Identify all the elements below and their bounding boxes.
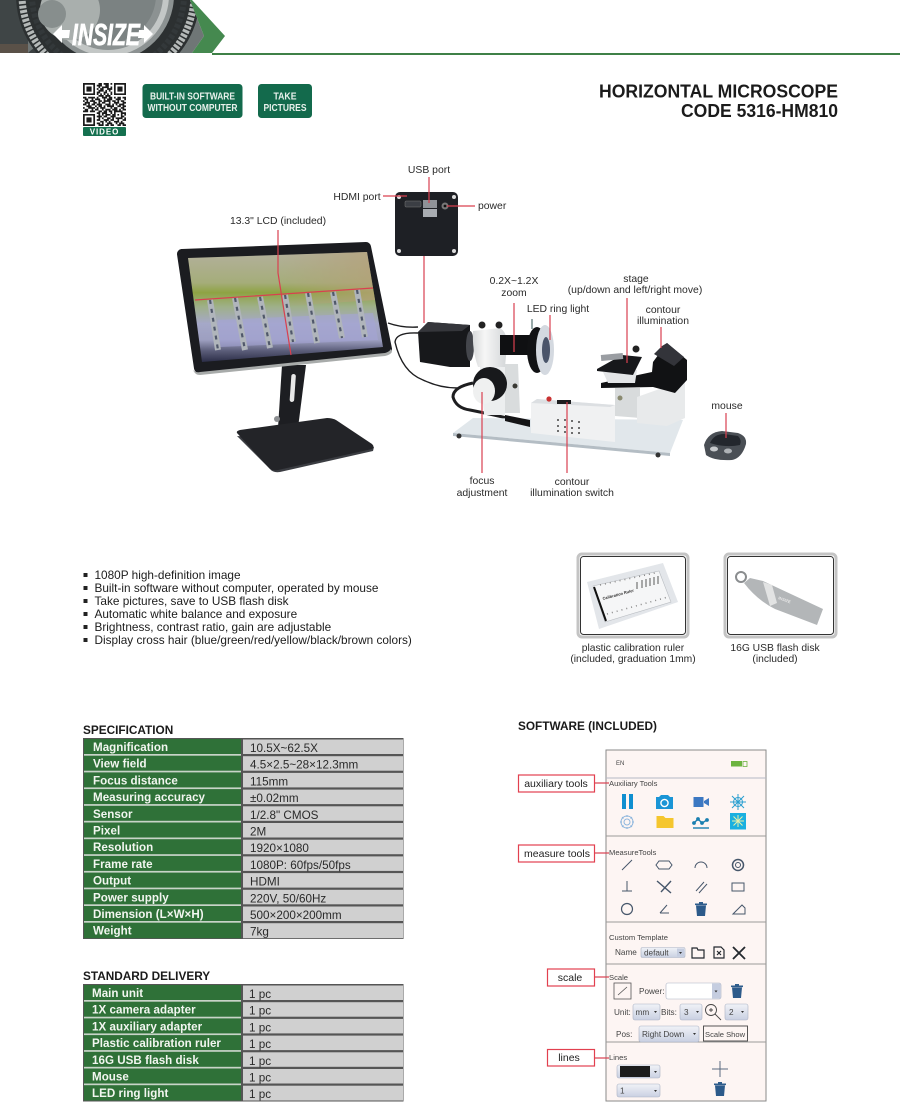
row: 1X camera adapter: 1 pc <box>249 1005 271 1018</box>
badge: built-in software: WITHOUT COMPUTER <box>148 102 238 114</box>
icon: chart <box>693 818 709 828</box>
feature list: Take pictures, save to USB flash disk <box>94 594 289 608</box>
row: power supply: 220V, 50/60Hz <box>250 892 326 905</box>
icon: brightness <box>730 794 746 810</box>
label: HDMI port: HDMI port <box>333 192 381 203</box>
row: 1X camera adapter <box>84 1002 403 1018</box>
icons: measure row 1 <box>622 860 744 870</box>
stage plate <box>603 370 637 383</box>
focus column <box>473 328 507 367</box>
label: contour illumination <box>637 305 689 348</box>
caption <box>570 643 696 665</box>
label: zoom: 0.2X~1.2X <box>490 276 538 287</box>
QR code with video tag <box>83 83 126 137</box>
row: output: HDMI <box>250 876 280 889</box>
table: specification <box>83 738 404 939</box>
row: 1X camera adapter: 1X camera adapter <box>92 1004 196 1017</box>
title <box>599 82 838 121</box>
lines section: Lines <box>609 1053 627 1062</box>
electrical box <box>531 399 615 442</box>
row: mouse: Mouse <box>92 1070 129 1084</box>
QR code with video tag: VIDEO <box>90 128 119 137</box>
label: USB port: USB port <box>408 165 450 176</box>
row: magnification: Magnification <box>93 741 168 754</box>
caption: plastic calibration ruler <box>582 643 685 654</box>
caption: (included, graduation 1mm) <box>570 654 696 665</box>
combo: bits: 3 <box>684 1008 689 1017</box>
icon: folder <box>656 816 674 828</box>
scale section: Pos: <box>616 1030 632 1039</box>
row: LED ring light: LED ring light <box>92 1087 169 1100</box>
custom template section: Name <box>615 948 637 957</box>
green rule <box>212 53 900 55</box>
badge: take pictures: PICTURES <box>264 102 306 114</box>
row: mouse: 1 pc <box>249 1072 271 1084</box>
auxiliary tools section <box>609 779 746 830</box>
accessory: calibration ruler: Calibration Ruler <box>602 588 635 601</box>
callout: auxiliary tools <box>518 775 609 792</box>
row: LED ring light <box>84 1085 403 1101</box>
icon: settings <box>620 815 634 829</box>
row: sensor <box>84 806 403 822</box>
row: view field: 4.5×2.5~28×12.3mm <box>250 759 358 772</box>
row: output: Output <box>93 875 131 888</box>
LED ring light <box>527 327 547 373</box>
INSIZE logo: INSIZE <box>72 17 141 52</box>
scale section: Unit: <box>614 1008 631 1017</box>
row: focus distance: 115mm <box>250 775 288 788</box>
heading: specification: SPECIFICATION <box>83 723 173 737</box>
label: contour illumination switch: contour <box>555 477 590 488</box>
measure tools section <box>609 848 745 916</box>
label: USB port <box>408 165 450 203</box>
combo: zoom level: 2 <box>729 1008 734 1017</box>
product illustration: LCD monitor <box>182 230 392 472</box>
row: plastic calibration ruler: Plastic calibration ruler <box>92 1037 221 1050</box>
icon: trash <box>731 984 743 998</box>
row: resolution: 1920×1080 <box>250 842 309 855</box>
row: magnification <box>84 739 403 755</box>
label: power: power <box>478 201 507 212</box>
row: frame rate: Frame rate <box>93 858 153 871</box>
software panel <box>606 750 766 1101</box>
row: resolution: Resolution <box>93 841 153 854</box>
label: focus adjustment: focus <box>470 476 494 487</box>
power plug <box>505 415 530 427</box>
icon: magnifier <box>706 1004 721 1020</box>
crosshair lines <box>195 230 373 355</box>
stage support <box>615 388 640 418</box>
label: HDMI port <box>333 192 407 203</box>
label: stage: stage <box>623 274 649 285</box>
auxiliary tools section: Auxiliary Tools <box>609 779 658 788</box>
camera body <box>418 322 470 367</box>
row: view field: View field <box>93 758 147 771</box>
row: 1X auxiliary adapter: 1X auxiliary adapter <box>92 1020 203 1033</box>
cables <box>388 323 530 423</box>
combo: position: Right Down <box>642 1030 685 1039</box>
row: main unit: 1 pc <box>249 988 271 1001</box>
row: weight: Weight <box>93 925 132 938</box>
combo: line width: 1 <box>620 1086 625 1096</box>
feature list: Brightness, contrast ratio, gain are adjustable <box>94 620 332 634</box>
header banner <box>0 0 900 55</box>
feature list: 1080P high-definition image <box>94 568 241 582</box>
label: contour illumination switch <box>530 402 614 499</box>
row: USB flash disk <box>84 1052 403 1068</box>
accessory: USB flash disk: INSIZE <box>778 595 792 604</box>
monitor stand <box>237 365 374 472</box>
green chevron <box>190 0 225 53</box>
row: power supply <box>84 889 403 905</box>
row: main unit <box>84 985 403 1001</box>
focus knob <box>473 367 507 401</box>
row: 1X auxiliary adapter <box>84 1018 403 1034</box>
base plate <box>453 418 683 453</box>
row: output <box>84 873 403 889</box>
row: weight <box>84 923 403 939</box>
label: focus adjustment <box>457 392 508 499</box>
icon: add line <box>712 1061 728 1077</box>
row: resolution <box>84 839 403 855</box>
scale section: Scale <box>609 973 628 982</box>
row: measuring accuracy: ±0.02mm <box>250 792 299 805</box>
label: focus adjustment: adjustment <box>457 488 508 499</box>
row: plastic calibration ruler <box>84 1035 403 1051</box>
badge: take pictures <box>258 84 312 118</box>
row: sensor: Sensor <box>93 808 133 821</box>
row: focus distance <box>84 772 403 788</box>
row: USB flash disk: 1 pc <box>249 1055 271 1068</box>
icon: camera <box>656 795 673 809</box>
custom template section: Custom Template <box>609 933 668 942</box>
title: CODE 5316-HM810 <box>681 101 838 121</box>
scale section: Power: <box>639 987 664 996</box>
accessory: calibration ruler <box>570 554 696 665</box>
row: main unit: Main unit <box>92 987 143 1000</box>
row: view field <box>84 756 403 772</box>
feature list <box>84 568 412 647</box>
combo: unit: mm <box>636 1008 649 1017</box>
icons: measure row 3 <box>622 902 745 916</box>
callout: measure tools <box>518 845 609 862</box>
feature list: Display cross hair (blue/green/red/yellow/black/brown colors) <box>94 633 412 647</box>
label: LED ring light <box>527 304 589 340</box>
language and battery: EN <box>616 761 624 767</box>
callout: lines: lines <box>558 1052 580 1064</box>
icons: measure row 2 <box>622 881 744 893</box>
row: mouse <box>84 1068 403 1084</box>
row: measuring accuracy <box>84 789 403 805</box>
callout: scale: scale <box>558 972 582 984</box>
row: plastic calibration ruler: 1 pc <box>249 1038 271 1051</box>
microscope assembly <box>418 319 687 458</box>
camera rear panel <box>395 192 458 256</box>
icons: template actions <box>692 947 745 959</box>
zoom tube <box>500 335 532 355</box>
icon: crosshair square <box>730 813 746 830</box>
feature list: Automatic white balance and exposure <box>94 607 298 621</box>
row: focus distance: Focus distance <box>93 774 178 787</box>
label: LED ring light: LED ring light <box>527 304 589 315</box>
label: contour illumination: illumination <box>637 316 689 327</box>
accessory: USB flash disk <box>725 554 836 665</box>
row: LED ring light: 1 pc <box>249 1088 271 1101</box>
label: stage: (up/down and left/right move) <box>568 285 702 296</box>
callout: lines <box>548 1050 609 1066</box>
combo: power <box>666 983 721 999</box>
button: scale show: Scale Show <box>705 1030 746 1039</box>
monitor body <box>182 247 387 368</box>
black platform <box>601 343 687 393</box>
scale section <box>609 973 748 1042</box>
lines section <box>609 1053 728 1097</box>
row: pixel <box>84 822 403 838</box>
row: measuring accuracy: Measuring accuracy <box>93 791 206 804</box>
callout: scale <box>548 969 609 986</box>
row: pixel: 2M <box>250 826 266 838</box>
icon: video <box>694 797 709 807</box>
row: weight: 7kg <box>250 926 269 939</box>
icon: pause <box>622 794 633 809</box>
row: USB flash disk: 16G USB flash disk <box>92 1054 199 1067</box>
label: LCD: 13.3" LCD (included) <box>230 216 326 227</box>
label: mouse: mouse <box>711 401 743 412</box>
row: pixel: Pixel <box>93 824 120 838</box>
mouse <box>704 431 746 460</box>
label: stage <box>568 274 702 363</box>
contour illumination head <box>654 343 684 366</box>
row: dimension: 500×200×200mm <box>250 909 342 922</box>
heading: software: SOFTWARE (INCLUDED) <box>518 719 657 733</box>
row: 1X auxiliary adapter: 1 pc <box>249 1021 271 1034</box>
label: contour illumination: contour <box>646 305 681 316</box>
monitor screen <box>188 252 383 362</box>
row: frame rate <box>84 856 403 872</box>
label: mouse <box>711 401 743 438</box>
icon: scale line <box>614 983 631 999</box>
row: dimension: Dimension (L×W×H) <box>93 908 204 921</box>
measure tools section: MeasureTools <box>609 848 656 857</box>
label: zoom <box>490 276 538 352</box>
row: power supply: Power supply <box>93 891 169 904</box>
caption: (included) <box>752 654 798 665</box>
callout: auxiliary tools: auxiliary tools <box>524 778 588 790</box>
icon: delete line <box>714 1082 726 1096</box>
caption: 16G USB flash disk <box>730 643 820 654</box>
row: frame rate: 1080P: 60fps/50fps <box>250 859 351 872</box>
label: contour illumination switch: illumination switch <box>530 488 614 499</box>
badge: built-in software <box>142 84 242 118</box>
callout: measure tools: measure tools <box>524 848 590 860</box>
camera connector line <box>423 256 425 323</box>
scale section: Bits: <box>661 1008 677 1017</box>
label: zoom: zoom <box>501 288 527 299</box>
heading: standard delivery: STANDARD DELIVERY <box>83 969 210 983</box>
INSIZE logo <box>53 17 153 52</box>
badge: built-in software: BUILT-IN SOFTWARE <box>150 90 235 102</box>
badge: take pictures: TAKE <box>274 90 296 102</box>
custom template section <box>609 933 745 959</box>
caption <box>730 643 820 665</box>
combo: default: default <box>644 948 669 958</box>
row: magnification: 10.5X~62.5X <box>250 742 318 755</box>
title: HORIZONTAL MICROSCOPE <box>599 82 838 102</box>
feature list: Built-in software without computer, operated by mouse <box>94 581 379 595</box>
language and battery <box>616 761 747 767</box>
combo: line colour <box>617 1065 660 1078</box>
row: sensor: 1/2.8" CMOS <box>250 809 319 822</box>
label: power <box>447 201 507 212</box>
header photo <box>0 0 204 53</box>
row: dimension <box>84 906 403 922</box>
table: standard delivery <box>83 984 404 1102</box>
